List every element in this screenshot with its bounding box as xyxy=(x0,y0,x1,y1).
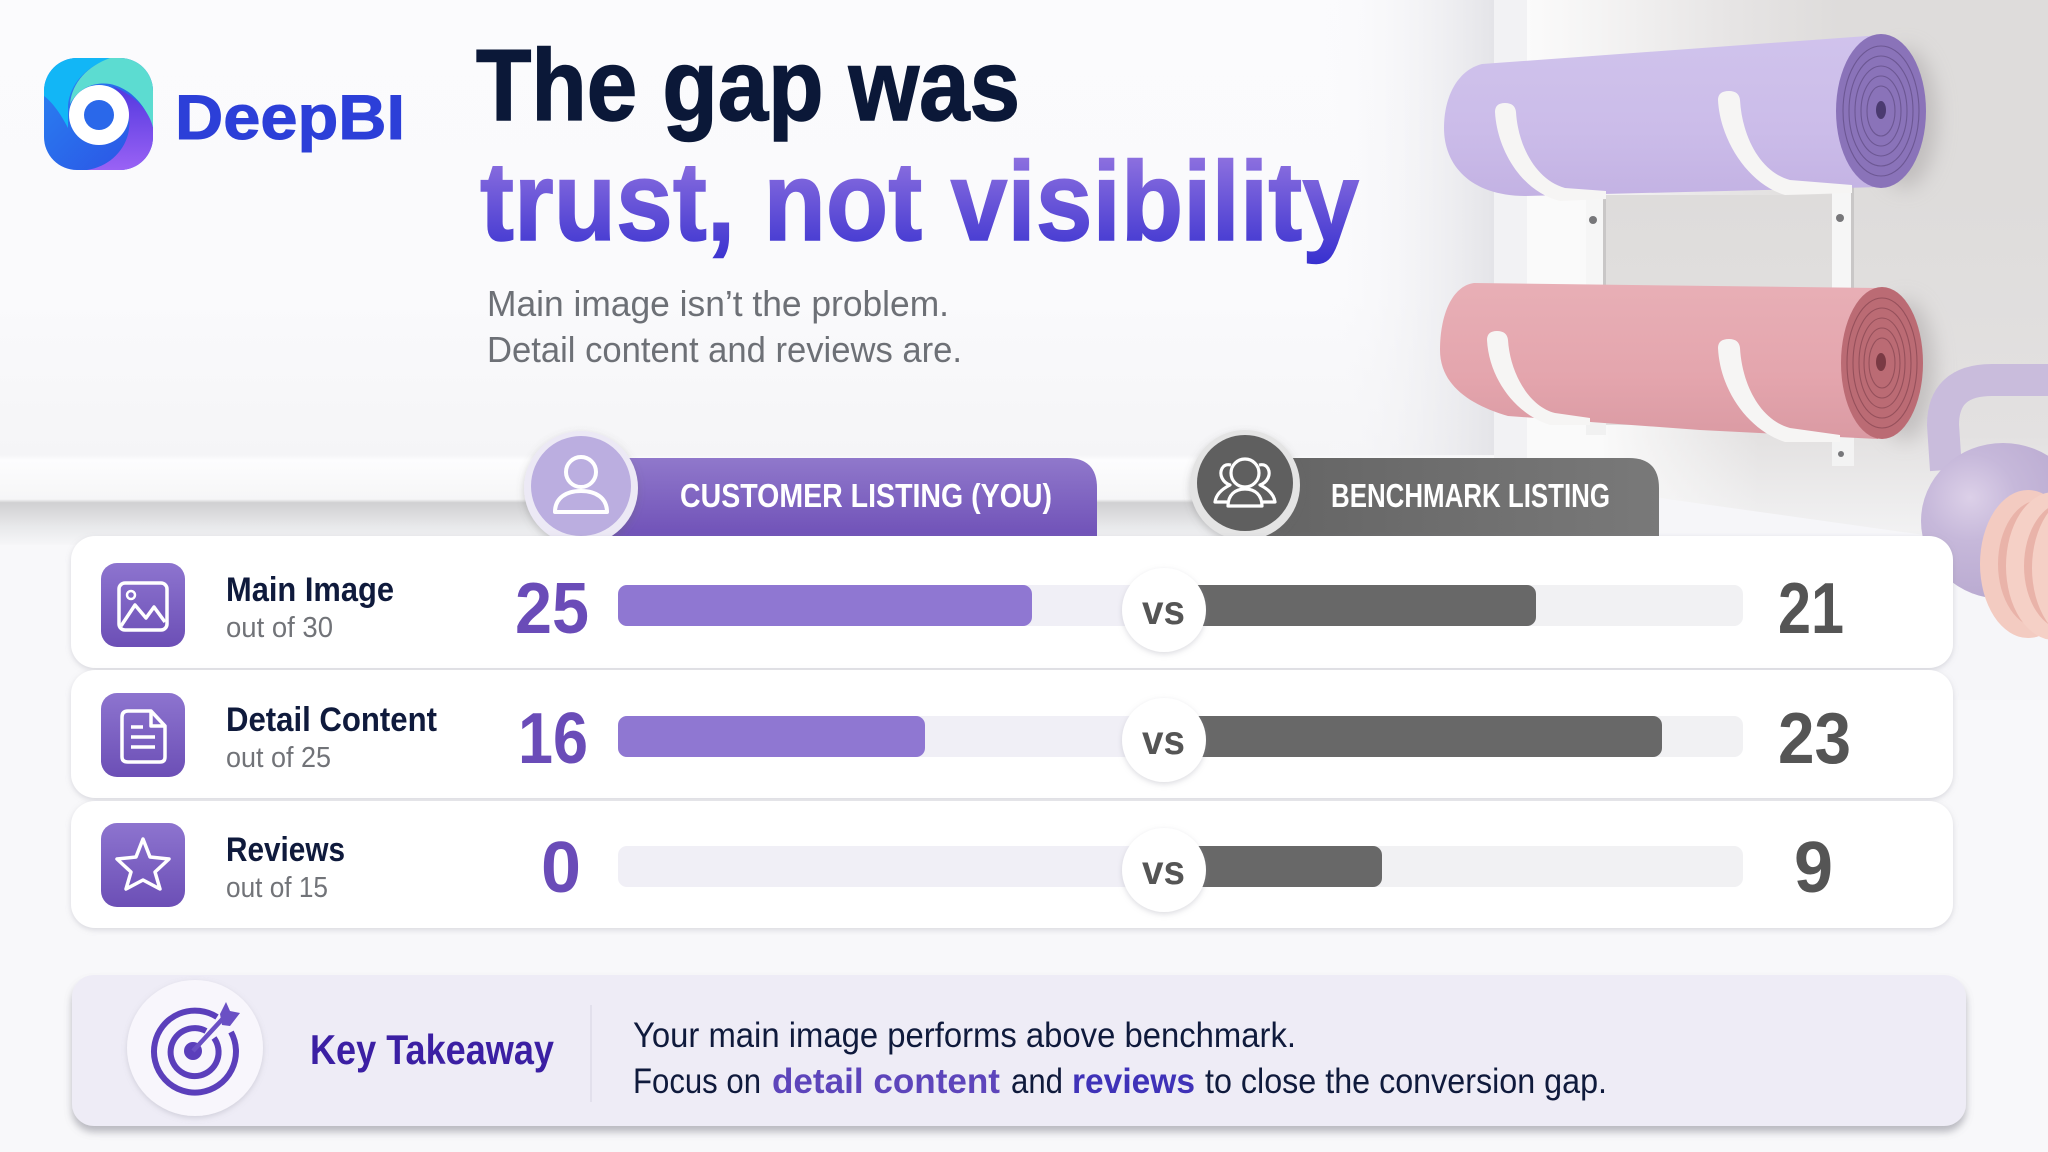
customer pill xyxy=(600,458,1097,536)
panel: key takeaway xyxy=(72,975,1966,1126)
benchmark score: 21 xyxy=(1778,569,1844,649)
row sublabel: out of 25 xyxy=(226,742,331,774)
row card xyxy=(71,536,1953,668)
customer score: 16 xyxy=(518,699,588,779)
takeaway heading: Key Takeaway xyxy=(310,1026,555,1073)
legend: customer listing xyxy=(524,431,1097,545)
vs badge: vs xyxy=(1142,847,1185,893)
product photo: yoga mats on wall rack xyxy=(1440,34,2048,642)
vs badge: vs xyxy=(1142,717,1185,763)
customer bar xyxy=(618,716,925,757)
icon: image xyxy=(101,563,185,647)
logo wordmark: DeepBI xyxy=(175,83,405,153)
takeaway text: to close the conversion gap. xyxy=(1205,1062,1607,1101)
panel: comparison table xyxy=(71,536,1953,928)
bar track left xyxy=(618,846,1178,887)
takeaway text: Your main image performs above benchmark. xyxy=(633,1016,1296,1055)
kettlebell xyxy=(1921,380,2048,599)
icon: customer person xyxy=(524,431,638,545)
bar track left xyxy=(618,716,1178,757)
vs badge xyxy=(1122,568,1206,652)
benchmark label: BENCHMARK LISTING xyxy=(1331,477,1610,514)
takeaway text xyxy=(633,1016,1607,1101)
pink mat hooks xyxy=(1487,331,1840,442)
customer bar xyxy=(618,585,1032,626)
vs badge xyxy=(1122,698,1206,782)
bar track right xyxy=(1170,716,1743,757)
logo mark xyxy=(44,58,153,170)
row label: Reviews xyxy=(226,831,345,869)
row label: Main Image xyxy=(226,571,394,609)
title xyxy=(476,30,1359,264)
takeaway text: Focus on xyxy=(633,1062,761,1101)
benchmark bar xyxy=(1170,716,1662,757)
vs badge: vs xyxy=(1142,587,1185,633)
bar track left xyxy=(618,585,1178,626)
icon: document xyxy=(101,693,185,777)
row card xyxy=(71,670,1953,798)
takeaway text: and xyxy=(1011,1062,1063,1101)
row label: Detail Content xyxy=(226,701,437,739)
logo: DeepBI xyxy=(44,58,405,170)
row: detail content xyxy=(71,670,1953,798)
icon: benchmark group xyxy=(1190,430,1300,540)
wall bracket left xyxy=(1586,190,1606,435)
subtitle: Detail content and reviews are. xyxy=(487,329,962,370)
wall bracket right xyxy=(1832,185,1854,466)
row: main image xyxy=(71,536,1953,668)
title line 1: The gap was xyxy=(476,30,1020,142)
purple mat xyxy=(1444,34,1926,196)
benchmark bar xyxy=(1170,585,1536,626)
row sublabel: out of 15 xyxy=(226,872,328,904)
takeaway background xyxy=(72,975,1966,1126)
takeaway text: detail content xyxy=(772,1062,1000,1101)
mat shadows xyxy=(1873,48,1937,440)
subtitle xyxy=(487,283,962,370)
bar track right xyxy=(1170,846,1743,887)
purple mat hooks xyxy=(1495,91,1852,201)
icon: star xyxy=(101,823,185,907)
subtitle: Main image isn’t the problem. xyxy=(487,283,949,324)
benchmark score: 23 xyxy=(1778,699,1851,779)
customer label: CUSTOMER LISTING (YOU) xyxy=(680,477,1052,514)
bar track right xyxy=(1170,585,1743,626)
row: reviews xyxy=(71,801,1953,928)
vs badge xyxy=(1122,828,1206,912)
takeaway text: reviews xyxy=(1072,1062,1195,1101)
massage roller xyxy=(1980,490,2048,642)
customer score: 0 xyxy=(541,828,581,908)
benchmark score: 9 xyxy=(1794,828,1833,908)
title line 2: trust, not visibility xyxy=(480,139,1359,264)
row card xyxy=(71,801,1953,928)
pink mat xyxy=(1440,283,1923,439)
row sublabel: out of 30 xyxy=(226,612,333,644)
legend: benchmark listing xyxy=(1190,430,1659,540)
customer score: 25 xyxy=(515,569,589,649)
icon: target xyxy=(127,980,263,1116)
benchmark bar xyxy=(1170,846,1382,887)
benchmark pill xyxy=(1260,458,1659,536)
